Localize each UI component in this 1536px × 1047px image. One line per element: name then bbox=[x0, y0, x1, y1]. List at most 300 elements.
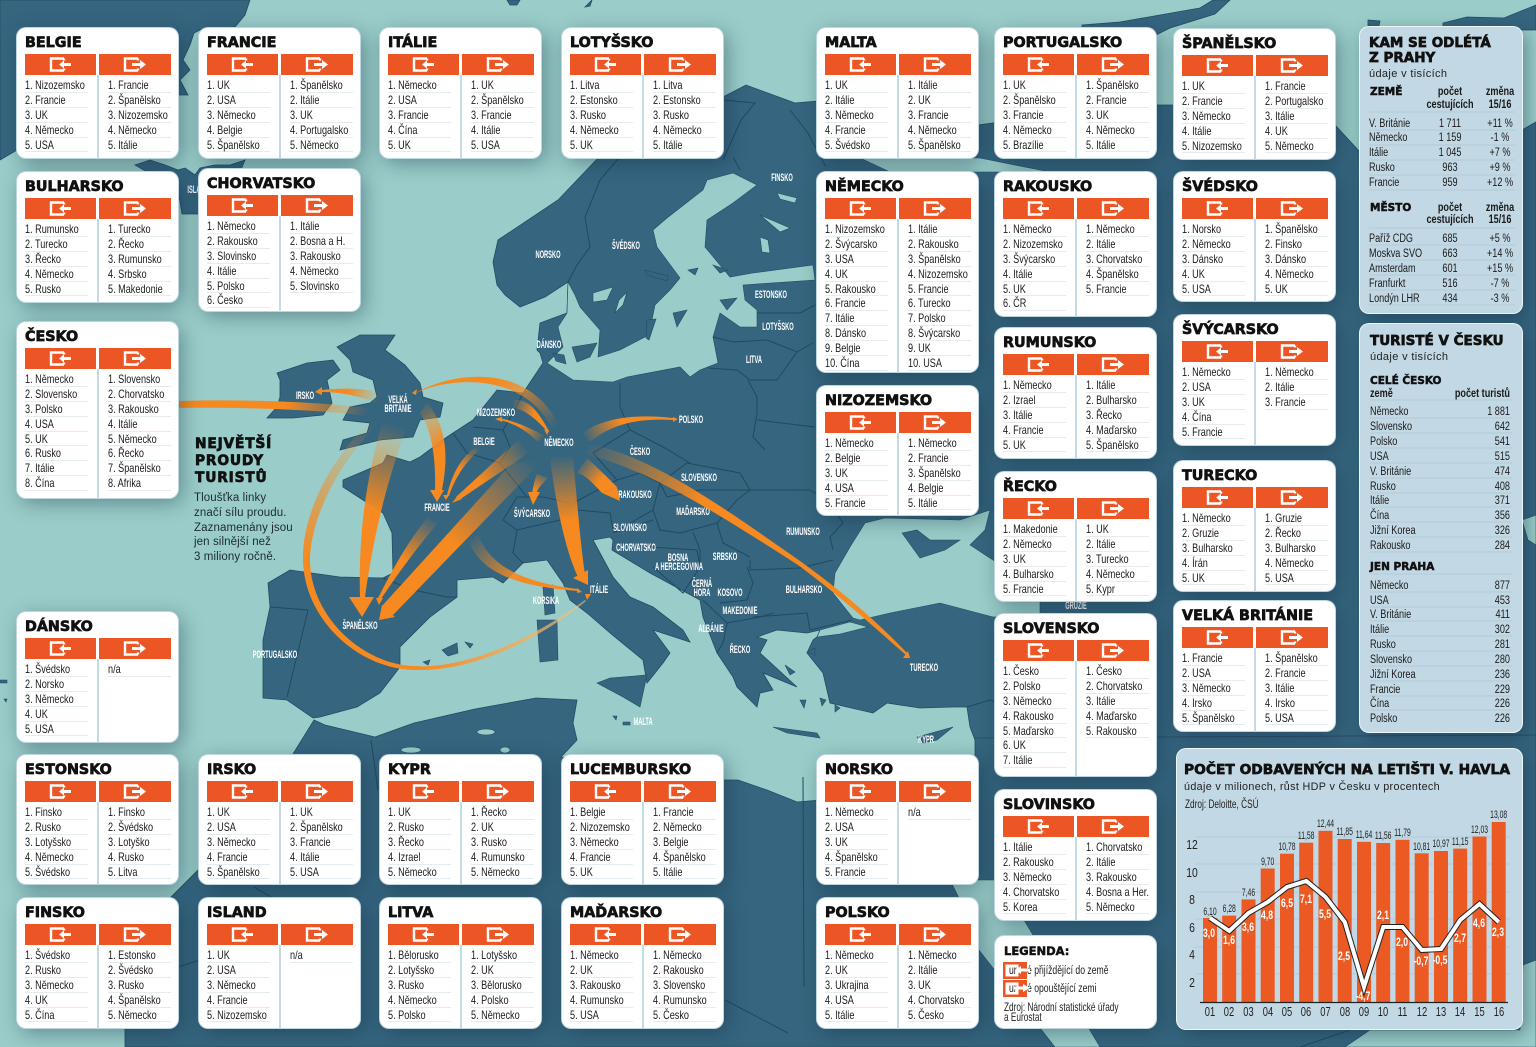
table headers: cities: změna bbox=[1486, 201, 1514, 214]
list: departures: 5. Německo bbox=[471, 865, 520, 879]
list: departures: 9. UK bbox=[908, 341, 931, 355]
list: arrivals: 1. Finsko bbox=[25, 805, 62, 819]
card: BELGIE bbox=[17, 28, 178, 158]
list: departures bbox=[653, 78, 716, 152]
table: countries: 1 159 bbox=[1439, 131, 1461, 144]
list: arrivals: 4. Francie bbox=[1003, 423, 1044, 437]
y axis labels: 2 bbox=[1189, 976, 1195, 990]
legend bbox=[995, 936, 1156, 1028]
list: departures: 2. Švédsko bbox=[108, 820, 153, 834]
list: departures: 5. Kypr bbox=[1086, 582, 1115, 596]
table: Prague only: 302 bbox=[1495, 623, 1510, 636]
list: arrivals: 6. ČR bbox=[1003, 296, 1026, 310]
table headers: cities: MĚSTO bbox=[1370, 201, 1411, 214]
card: LITVA bbox=[380, 898, 541, 1028]
list: departures: 1. Itálie bbox=[290, 219, 319, 233]
list: arrivals: 3. Německo bbox=[1003, 870, 1052, 884]
list: arrivals: 4. Francie bbox=[825, 123, 866, 137]
list: arrivals: 3. UK bbox=[825, 466, 848, 480]
list: arrivals: 2. Slovensko bbox=[25, 387, 77, 401]
GDP value labels: 3,6 bbox=[1242, 922, 1254, 934]
list: arrivals: 1. Německo bbox=[570, 948, 619, 962]
heading: ČESKO bbox=[25, 328, 78, 344]
text block: flow explanation: Tloušťka linky bbox=[194, 492, 266, 504]
list: arrivals: 1. UK bbox=[825, 78, 848, 92]
list: arrivals: 6. UK bbox=[1003, 738, 1026, 752]
x axis labels: 04 bbox=[1263, 1006, 1273, 1019]
icon: departures bbox=[899, 924, 971, 945]
list: departures: 5. Španělsko bbox=[1086, 438, 1139, 452]
list: arrivals: 2. UK bbox=[825, 963, 848, 977]
list: departures bbox=[108, 372, 171, 491]
heading: BULHARSKO bbox=[25, 178, 124, 194]
list: arrivals: 5. Korea bbox=[1003, 900, 1037, 914]
list: arrivals bbox=[825, 78, 888, 152]
table: cities: Amsterdam bbox=[1369, 262, 1416, 275]
list: departures: 2. Rakousko bbox=[653, 963, 704, 977]
list: departures: 5. Německo bbox=[1265, 139, 1314, 153]
arrow: transatlantic flow to Britain bbox=[178, 400, 368, 416]
x axis labels: 09 bbox=[1359, 1006, 1369, 1019]
list: departures: 2. Španělsko bbox=[108, 93, 161, 107]
map labels: ČERNÁ bbox=[692, 576, 713, 590]
list: departures: 4. Španělsko bbox=[1086, 267, 1139, 281]
bar value labels: 11,15 bbox=[1452, 835, 1468, 847]
bar value labels: 6,28 bbox=[1223, 902, 1236, 914]
table: countries: V. Británie bbox=[1369, 117, 1410, 130]
list: departures: 1. Španělsko bbox=[1265, 222, 1318, 236]
list: arrivals: 2. Španělsko bbox=[1003, 93, 1056, 107]
x axis labels: 06 bbox=[1301, 1006, 1311, 1019]
text block: flow explanation bbox=[194, 492, 293, 563]
icon: departures bbox=[462, 781, 534, 802]
GDP value labels: 5,5 bbox=[1319, 909, 1331, 921]
list: arrivals: 5. USA bbox=[25, 138, 54, 152]
panel heading: KAM SE ODLÉTÁ bbox=[1369, 34, 1491, 51]
panel heading: TURISTÉ V ČESKU bbox=[1370, 331, 1504, 349]
x axis labels: 15 bbox=[1474, 1006, 1485, 1019]
list: arrivals: 5. Španělsko bbox=[207, 865, 260, 879]
list: arrivals: 5. Polsko bbox=[388, 1008, 426, 1022]
heading: PORTUGALSKO bbox=[1003, 34, 1122, 50]
list: arrivals: 3. Lotyšsko bbox=[25, 835, 71, 849]
list: departures: 5. Česko bbox=[653, 1008, 689, 1022]
icon: departures bbox=[1256, 487, 1328, 508]
list: arrivals: 5. Nizozemsko bbox=[1182, 139, 1242, 153]
list: departures: 1. Estonsko bbox=[108, 948, 156, 962]
list: arrivals bbox=[825, 222, 888, 371]
chart subtitle: údaje v milionech, růst HDP v Česku v procentech bbox=[1184, 780, 1440, 793]
card: ISLAND bbox=[199, 898, 360, 1028]
list: arrivals: 5. Polsko bbox=[207, 279, 245, 293]
list: arrivals: 3. Rusko bbox=[570, 108, 606, 122]
list: arrivals: 4. Itálie bbox=[207, 264, 236, 278]
list: departures: 4. UK bbox=[1265, 124, 1288, 138]
list: departures: 6. Řecko bbox=[108, 446, 144, 460]
list: arrivals: 4. Írán bbox=[1182, 556, 1208, 570]
list: arrivals: 1. UK bbox=[388, 805, 411, 819]
table: whole Czechia: Německo bbox=[1370, 405, 1409, 418]
list: arrivals: 1. Německo bbox=[207, 219, 256, 233]
list: departures: 2. Německo bbox=[653, 820, 702, 834]
list: departures: 4. Německo bbox=[1086, 123, 1135, 137]
list: departures: 1. Francie bbox=[108, 78, 149, 92]
table: Prague only: V. Británie bbox=[1370, 608, 1411, 621]
list: arrivals: 3. Dánsko bbox=[1182, 252, 1223, 266]
list: departures: 2. UK bbox=[471, 963, 494, 977]
list: arrivals: 3. USA bbox=[825, 252, 854, 266]
heading: CHORVATSKO bbox=[207, 176, 315, 192]
list: departures: 3. Rusko bbox=[471, 835, 507, 849]
list: arrivals: 2. Polsko bbox=[1003, 679, 1041, 693]
list: arrivals: 1. Litva bbox=[570, 78, 599, 92]
bar value labels: 10,97 bbox=[1432, 837, 1450, 849]
list: arrivals: 3. Německo bbox=[1182, 681, 1231, 695]
list: departures: 2. Bulharsko bbox=[1086, 393, 1137, 407]
list: departures: 1. Francie bbox=[653, 805, 694, 819]
heading: IRSKO bbox=[207, 762, 256, 778]
map labels: RAKOUSKO bbox=[618, 488, 652, 501]
table: Prague only: 453 bbox=[1495, 594, 1510, 607]
table: whole Czechia: Jižní Korea bbox=[1370, 524, 1416, 537]
list: arrivals bbox=[570, 948, 633, 1022]
GDP value labels: 6,5 bbox=[1281, 898, 1293, 910]
list: arrivals: 5. UK bbox=[570, 138, 593, 152]
list: arrivals: 4. Německo bbox=[25, 267, 74, 281]
list: departures: 4. Rumunsko bbox=[471, 850, 525, 864]
list: departures: 3. Francie bbox=[290, 835, 331, 849]
list: arrivals: 7. Itálie bbox=[1003, 753, 1032, 767]
list: arrivals bbox=[825, 436, 888, 510]
heading: largest tourist flows bbox=[194, 434, 272, 486]
list: arrivals: 4. USA bbox=[825, 993, 854, 1007]
list: departures: 5. USA bbox=[471, 138, 500, 152]
list: departures bbox=[1086, 222, 1149, 296]
list: arrivals: 5. Rakousko bbox=[825, 282, 876, 296]
icon: arrivals bbox=[25, 638, 96, 659]
heading: LUCEMBURSKO bbox=[570, 762, 691, 778]
table: countries: Německo bbox=[1369, 131, 1408, 144]
icon: departures bbox=[281, 195, 353, 216]
icon: departures bbox=[281, 781, 353, 802]
GDP value labels bbox=[1203, 894, 1504, 1003]
GDP value labels: 2,5 bbox=[1338, 951, 1350, 963]
list: arrivals: 5. USA bbox=[570, 1008, 599, 1022]
list: departures: 7. Španělsko bbox=[108, 461, 161, 475]
list: departures: 1. Slovensko bbox=[108, 372, 160, 386]
map labels: ŠPANĚLSKO bbox=[342, 618, 378, 632]
list: arrivals: 3. Ukrajina bbox=[825, 978, 869, 992]
list: arrivals: 2. Rusko bbox=[25, 820, 61, 834]
list: arrivals: 5. Rusko bbox=[25, 282, 61, 296]
list: arrivals bbox=[1003, 664, 1066, 768]
heading: BELGIE bbox=[25, 34, 82, 50]
icon: departures bbox=[899, 781, 971, 802]
list: arrivals: 2. Estonsko bbox=[570, 93, 618, 107]
list: arrivals: 1. Nizozemsko bbox=[25, 78, 85, 92]
list: arrivals: 3. Německo bbox=[570, 835, 619, 849]
list: arrivals bbox=[570, 805, 633, 879]
list: arrivals: 4. Francie bbox=[207, 993, 248, 1007]
icon: arrivals bbox=[1182, 487, 1253, 508]
list: departures: 3. Rusko bbox=[653, 108, 689, 122]
list: arrivals: 2. USA bbox=[207, 963, 236, 977]
icon: departures bbox=[1077, 498, 1149, 519]
GDP value labels: -4,7 bbox=[1356, 991, 1371, 1003]
list: departures: 3. Španělsko bbox=[908, 466, 961, 480]
list: arrivals: 1. Německo bbox=[388, 78, 437, 92]
list: departures bbox=[1265, 511, 1328, 585]
table headers: countries: 15/16 bbox=[1489, 98, 1511, 111]
text block: flow explanation: jen silnější než bbox=[194, 536, 271, 548]
list: departures: 4. Německo bbox=[1265, 267, 1314, 281]
bar value labels: 10,78 bbox=[1278, 840, 1296, 852]
map labels: HORA bbox=[694, 586, 711, 599]
icon: departures bbox=[99, 781, 171, 802]
card: NĚMECKO bbox=[817, 172, 978, 372]
icon: arrivals bbox=[570, 54, 641, 75]
list: departures: 8. Afrika bbox=[108, 476, 141, 490]
list: arrivals: 2. USA bbox=[825, 820, 854, 834]
x axis labels bbox=[1205, 1006, 1504, 1019]
icon: arrivals bbox=[1182, 341, 1253, 362]
list: departures: 1. Gruzie bbox=[1265, 511, 1302, 525]
x axis labels: 14 bbox=[1455, 1006, 1465, 1019]
list: departures bbox=[471, 78, 534, 152]
map labels: PORTUGALSKO bbox=[253, 648, 297, 661]
table: countries: +7 % bbox=[1489, 146, 1511, 159]
card: FRANCIE bbox=[199, 28, 360, 158]
heading: RUMUNSKO bbox=[1003, 334, 1096, 350]
list: arrivals: 4. USA bbox=[25, 417, 54, 431]
list: departures: 5. USA bbox=[1265, 711, 1294, 725]
table headers: cities: počet bbox=[1438, 201, 1463, 214]
list: arrivals: 1. UK bbox=[1003, 78, 1026, 92]
table: cities: Paříž CDG bbox=[1369, 232, 1413, 245]
list: arrivals: 3. Německo bbox=[25, 978, 74, 992]
legend item: arrivals: é přijíždějící do země bbox=[1027, 965, 1109, 977]
list: departures: 2. Itálie bbox=[908, 963, 937, 977]
table: Prague only: Německo bbox=[1370, 579, 1409, 592]
map labels: FRANCIE bbox=[424, 501, 450, 514]
table: Prague only: USA bbox=[1370, 594, 1389, 607]
list: departures: 4. Belgie bbox=[908, 481, 943, 495]
arrow: Germany to Switzerland bbox=[528, 474, 548, 505]
list: arrivals: 4. Španělsko bbox=[825, 850, 878, 864]
list: departures bbox=[908, 436, 971, 510]
list: arrivals: 2. Rakousko bbox=[1003, 855, 1054, 869]
icon: arrivals bbox=[1182, 627, 1253, 648]
list: departures: 4. Německo bbox=[1086, 567, 1135, 581]
list: arrivals bbox=[1003, 222, 1066, 311]
list: arrivals: 2. Izrael bbox=[1003, 393, 1035, 407]
list: arrivals: 4. Irsko bbox=[1182, 696, 1212, 710]
table: cities: 601 bbox=[1442, 262, 1458, 275]
list: departures bbox=[471, 948, 534, 1022]
list: arrivals: 2. Nizozemsko bbox=[570, 820, 630, 834]
list: departures: 5. Německo bbox=[290, 138, 339, 152]
text block: flow explanation: 3 miliony ročně. bbox=[194, 551, 276, 563]
arrow: Germany to France bbox=[452, 440, 530, 503]
list: arrivals: 1. Německo bbox=[1182, 511, 1231, 525]
list: arrivals: 6. Rusko bbox=[25, 446, 61, 460]
heading: largest tourist flows: NEJVĚTŠÍ bbox=[195, 436, 272, 452]
list: departures: 2. Řecko bbox=[108, 237, 144, 251]
list: departures: 1. UK bbox=[290, 805, 313, 819]
table: whole Czechia: Slovensko bbox=[1370, 420, 1412, 433]
list: arrivals: 4. UK bbox=[825, 267, 848, 281]
list: departures: 5. Itálie bbox=[653, 138, 682, 152]
list: departures: 3. Nizozemsko bbox=[108, 108, 168, 122]
list: departures: 2. Francie bbox=[1086, 93, 1127, 107]
arrow: Germany to Austria bbox=[577, 458, 620, 501]
table: cities: 516 bbox=[1442, 277, 1458, 290]
section heading: whole Czechia: země bbox=[1370, 387, 1393, 400]
map labels: KOSOVO bbox=[717, 586, 743, 599]
GDP growth line bbox=[1210, 881, 1499, 987]
bar value labels: 11,79 bbox=[1394, 826, 1411, 838]
list: arrivals: 5. UK bbox=[570, 865, 593, 879]
icon: departures bbox=[1077, 354, 1149, 375]
heading: SLOVINSKO bbox=[1003, 796, 1095, 812]
map labels: SRBSKO bbox=[713, 550, 737, 563]
card: ČESKO bbox=[17, 322, 178, 498]
map labels: LITVA bbox=[746, 353, 762, 366]
legend item: departures: é opouštějící zemi bbox=[1027, 983, 1097, 995]
table: Prague only bbox=[1370, 579, 1510, 725]
heading: largest tourist flows: PROUDY bbox=[195, 453, 264, 469]
bars bbox=[1203, 822, 1506, 1002]
card: RAKOUSKO bbox=[995, 172, 1156, 316]
list: arrivals: 3. Francie bbox=[1003, 108, 1044, 122]
map labels: FINSKO bbox=[771, 171, 793, 184]
list: departures: 5. Francie bbox=[908, 282, 949, 296]
list: departures bbox=[1086, 664, 1149, 738]
panel subtitle: údaje v tisících bbox=[1370, 351, 1448, 363]
list: departures bbox=[471, 805, 534, 879]
list: arrivals: 4. Bulharsko bbox=[1003, 567, 1054, 581]
list: departures: 2. Itálie bbox=[1086, 855, 1115, 869]
list: departures: 4. Německo bbox=[108, 123, 157, 137]
table: whole Czechia: V. Británie bbox=[1370, 465, 1411, 478]
icon: departures bbox=[99, 638, 171, 659]
list: arrivals: 2. Itálie bbox=[825, 93, 854, 107]
list: departures: 2. Estonsko bbox=[653, 93, 701, 107]
chart heading: POČET ODBAVENÝCH NA LETIŠTI V. HAVLA bbox=[1184, 760, 1511, 778]
list: arrivals: 2. Norsko bbox=[25, 677, 64, 691]
list: arrivals: 1. Švédsko bbox=[25, 948, 70, 962]
list: arrivals: 4. Chorvatsko bbox=[1003, 885, 1059, 899]
list: departures: 4. Německo bbox=[1265, 556, 1314, 570]
bar value labels: 9,70 bbox=[1261, 855, 1274, 867]
list: arrivals: 4. Německo bbox=[570, 123, 619, 137]
table: whole Czechia: 371 bbox=[1495, 494, 1510, 507]
icon: arrivals bbox=[1003, 816, 1074, 837]
list: arrivals bbox=[1182, 511, 1245, 585]
icon: arrivals bbox=[1182, 55, 1253, 76]
legend title: LEGENDA: bbox=[1004, 944, 1069, 958]
icon: arrivals bbox=[825, 54, 896, 75]
card: LUCEMBURSKO bbox=[562, 755, 723, 884]
map labels: ITÁLIE bbox=[590, 582, 608, 596]
islands bbox=[0, 265, 960, 743]
arrow: Germany to Turkey bbox=[585, 444, 910, 658]
x axis labels: 13 bbox=[1436, 1006, 1446, 1019]
list: arrivals bbox=[825, 948, 888, 1022]
table: whole Czechia: 284 bbox=[1495, 539, 1510, 552]
list: departures: 4. Nizozemsko bbox=[908, 267, 968, 281]
x axis labels: 16 bbox=[1494, 1006, 1504, 1019]
table: Prague only: 411 bbox=[1495, 608, 1510, 621]
table: whole Czechia: Polsko bbox=[1370, 435, 1397, 448]
map labels: BOSNA bbox=[668, 551, 689, 564]
legend item: arrivals: ur bbox=[1009, 965, 1017, 977]
table: countries: +11 % bbox=[1487, 117, 1513, 130]
list: departures bbox=[908, 222, 971, 371]
arrow: Germany to Netherlands bbox=[495, 417, 545, 442]
map labels: ESTONSKO bbox=[755, 288, 787, 301]
x axis labels: 11 bbox=[1398, 1006, 1407, 1019]
list: departures: 3. Francie bbox=[471, 108, 512, 122]
panel heading bbox=[1369, 34, 1491, 66]
table: cities: -3 % bbox=[1491, 292, 1510, 305]
list: departures: 4. Maďarsko bbox=[1086, 709, 1137, 723]
list: arrivals: 5. Brazílie bbox=[1003, 138, 1044, 152]
list: departures: 2. Španělsko bbox=[471, 93, 524, 107]
bar value labels bbox=[1203, 808, 1507, 917]
list: arrivals: 1. Německo bbox=[1003, 222, 1052, 236]
list: arrivals: 1. UK bbox=[207, 805, 230, 819]
list: departures: 3. Bělorusko bbox=[471, 978, 522, 992]
list: departures bbox=[1086, 378, 1149, 452]
list: arrivals: 4. Čína bbox=[388, 123, 417, 137]
list: departures: 8. Švýcarsko bbox=[908, 326, 960, 340]
list: arrivals: 3. Řecko bbox=[25, 252, 61, 266]
list: departures: 4. Itálie bbox=[471, 123, 500, 137]
heading: ŠVÝCARSKO bbox=[1182, 322, 1279, 338]
list: departures: 4. Chorvatsko bbox=[908, 993, 964, 1007]
legend source: a Eurostat bbox=[1004, 1012, 1042, 1024]
table: cities bbox=[1369, 232, 1513, 305]
icon: departures bbox=[899, 54, 971, 75]
heading: FINSKO bbox=[25, 904, 85, 920]
arrow: Germany to Poland bbox=[583, 416, 678, 442]
list: departures: 1. Finsko bbox=[108, 805, 145, 819]
table: Prague only: Slovensko bbox=[1370, 653, 1412, 666]
table: countries: 959 bbox=[1442, 176, 1458, 189]
list: arrivals: 2. Gruzie bbox=[1182, 526, 1219, 540]
list: departures: 3. Řecko bbox=[1086, 408, 1122, 422]
panel heading: Z PRAHY bbox=[1369, 50, 1436, 66]
icon: arrivals bbox=[25, 924, 96, 945]
list: departures: 2. Řecko bbox=[1265, 526, 1301, 540]
icon: departures bbox=[1256, 55, 1328, 76]
icon: arrivals bbox=[388, 924, 459, 945]
map labels: SLOVENSKO bbox=[681, 471, 717, 484]
list: departures: 4. Maďarsko bbox=[1086, 423, 1137, 437]
list: arrivals: 6. Česko bbox=[207, 293, 243, 307]
list: departures: 5. Česko bbox=[908, 1008, 944, 1022]
list: departures: 1. Chorvatsko bbox=[1086, 840, 1142, 854]
list: arrivals: 6. Francie bbox=[825, 296, 866, 310]
card: BULHARSKO bbox=[17, 172, 178, 302]
icon: arrivals bbox=[207, 924, 278, 945]
list: arrivals bbox=[388, 948, 451, 1022]
table: Prague only: Itálie bbox=[1370, 623, 1389, 636]
list: departures: 4. Itálie bbox=[290, 850, 319, 864]
table: cities: Franfurkt bbox=[1369, 277, 1405, 290]
map labels: KYPR bbox=[918, 733, 934, 746]
